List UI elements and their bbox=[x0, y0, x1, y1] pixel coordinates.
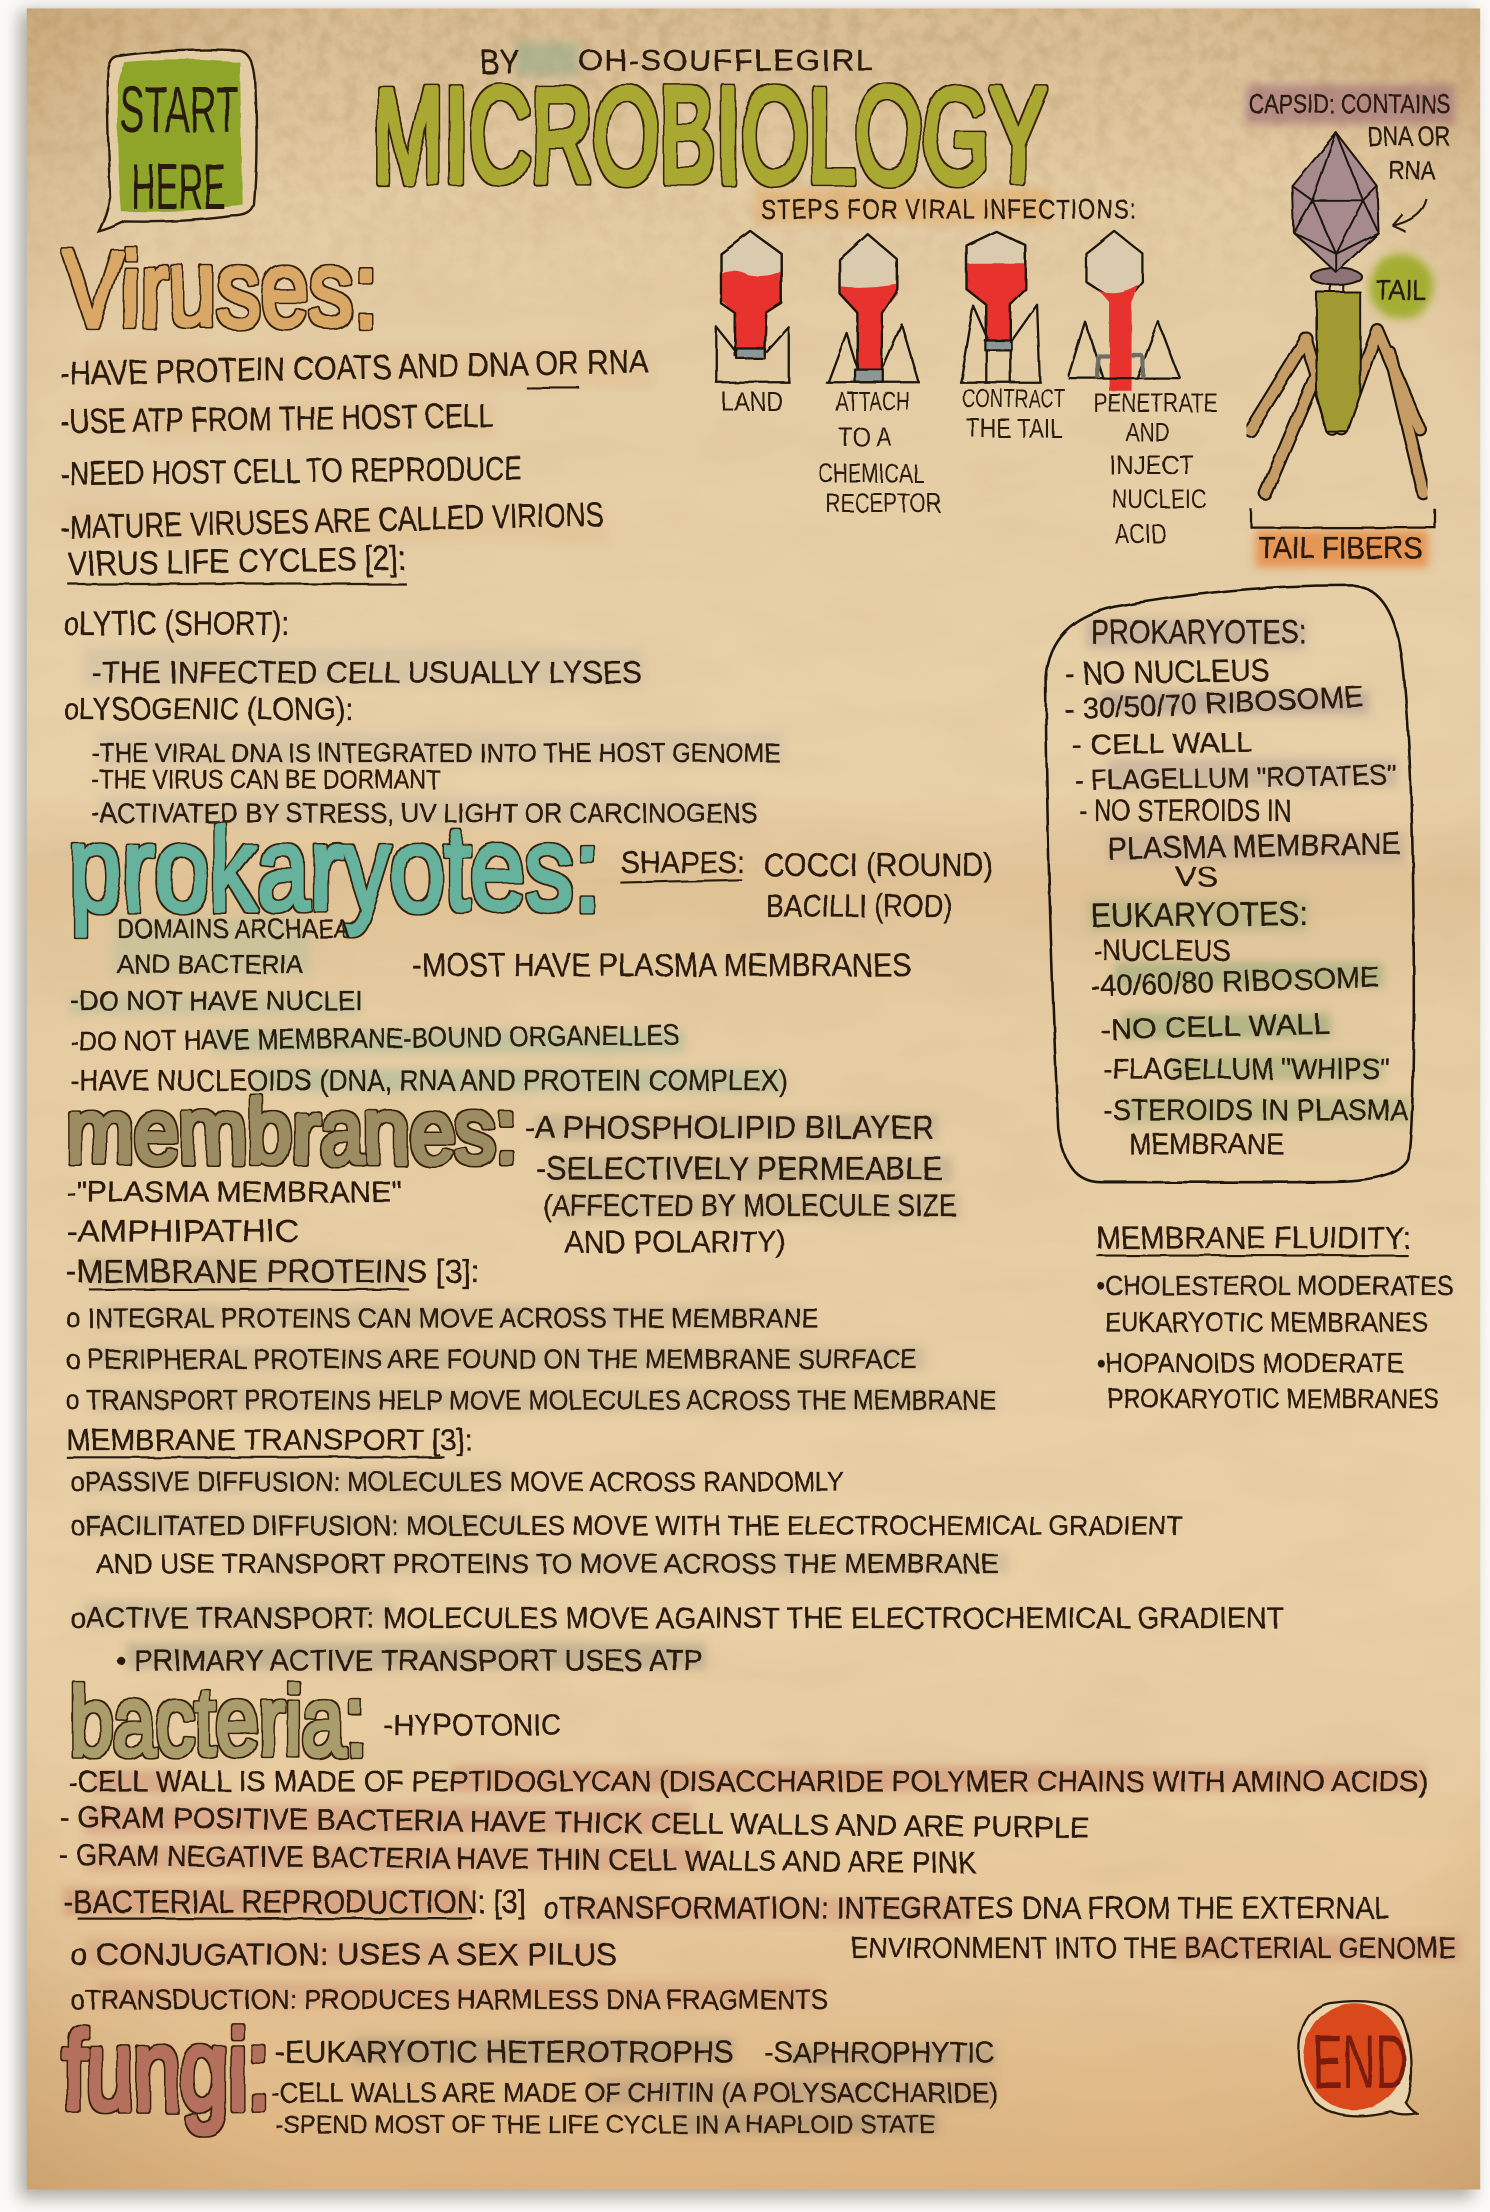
title: microbiology: MICROBIOLOGY bbox=[372, 59, 1047, 211]
text block: bacteria facts: -HYPOTONIC bbox=[384, 1709, 562, 1742]
text block: prokaryote shapes and facts: -DO NOT HAVE NUCLEI bbox=[71, 984, 363, 1016]
text block: membrane proteins: -MEMBRANE PROTEINS [3]: bbox=[66, 1253, 480, 1289]
text block: membrane transport bbox=[66, 1424, 1284, 1677]
text block: membrane transport: oACTIVE TRANSPORT: MOLECULES MOVE AGAINST THE ELECTROCHEMICAL GRADIENT bbox=[71, 1602, 1284, 1635]
collar bbox=[1311, 268, 1362, 285]
text block: bacterial reproduction: oTRANSDUCTION: PRODUCES HARMLESS DNA FRAGMENTS bbox=[71, 1983, 828, 2015]
text block: virus facts: -HAVE PROTEIN COATS AND DNA OR RNA bbox=[60, 343, 649, 393]
text block: prokaryote shapes and facts: DOMAINS ARCHAEA bbox=[117, 914, 350, 944]
label: attach to a chemical receptor: TO A bbox=[838, 422, 892, 452]
text block: fungi facts: -CELL WALLS ARE MADE OF CHITIN (A POLYSACCHARIDE) bbox=[271, 2076, 998, 2108]
diagram: step 1 land bbox=[715, 231, 790, 417]
eukaryotes list: -STEROIDS IN PLASMA bbox=[1103, 1094, 1408, 1127]
end speech bubble bbox=[1299, 2001, 1417, 2116]
text block: bacterial reproduction: -BACTERIAL REPRODUCTION: [3] bbox=[63, 1884, 526, 1920]
text block: fungi facts: -EUKARYOTIC HETEROTROPHS bbox=[275, 2034, 734, 2069]
bracket bbox=[1252, 509, 1435, 528]
prokaryotes list: VS bbox=[1175, 860, 1218, 892]
text block: prokaryote shapes and facts: -HAVE NUCLEOIDS (DNA, RNA AND PROTEIN COMPLEX) bbox=[71, 1064, 787, 1097]
text block: virus life cycles: VIRUS LIFE CYCLES [2]: bbox=[67, 540, 406, 584]
text block: membrane transport: oFACILITATED DIFFUSION: MOLECULES MOVE WITH THE ELECTROCHEMICAL GRADIENT bbox=[71, 1509, 1182, 1541]
text block: fungi facts: -SPEND MOST OF THE LIFE CYCLE IN A HAPLOID STATE bbox=[275, 2111, 935, 2139]
text block: virus life cycles: -THE VIRUS CAN BE DORMANT bbox=[92, 765, 440, 795]
text block: membrane fluidity bbox=[1096, 1220, 1453, 1414]
text block: membrane facts: -SELECTIVELY PERMEABLE bbox=[536, 1150, 943, 1186]
prokaryotes list bbox=[1064, 613, 1401, 892]
eukaryotes list: -NO CELL WALL bbox=[1100, 1008, 1331, 1047]
label: penetrate and inject nucleic acid: AND bbox=[1126, 418, 1170, 448]
text block: membrane fluidity: •HOPANOIDS MODERATE bbox=[1096, 1347, 1404, 1379]
text block: membrane transport: AND USE TRANSPORT PROTEINS TO MOVE ACROSS THE MEMBRANE bbox=[96, 1547, 999, 1579]
text block: membrane facts: (AFFECTED BY MOLECULE SIZE bbox=[543, 1188, 957, 1223]
text block: membrane proteins: o PERIPHERAL PROTEINS ARE FOUND ON THE MEMBRANE SURFACE bbox=[66, 1342, 917, 1374]
label: penetrate and inject nucleic acid: PENETRATE bbox=[1094, 388, 1218, 418]
text block: prokaryote shapes and facts: -MOST HAVE PLASMA MEMBRANES bbox=[412, 947, 911, 983]
text block: prokaryote shapes and facts: COCCI (ROUND) bbox=[763, 847, 993, 883]
text block: membrane facts: -"PLASMA MEMBRANE" bbox=[66, 1176, 402, 1209]
text block: bacteria facts: -CELL WALL IS MADE OF PEPTIDOGLYCAN (DISACCHARIDE POLYMER CHAINS WITH AMINO ACIDS) bbox=[68, 1766, 1428, 1799]
prokaryotes list: - CELL WALL bbox=[1072, 726, 1253, 761]
text block: bacteria facts: - GRAM POSITIVE BACTERIA HAVE THICK CELL WALLS AND ARE PURPLE bbox=[59, 1801, 1089, 1845]
text block: virus life cycles: -THE VIRAL DNA IS INTEGRATED INTO THE HOST GENOME bbox=[92, 738, 780, 768]
heading: steps for viral infections: STEPS FOR VIRAL INFECTIONS: bbox=[761, 193, 1137, 225]
prokaryotes list: - FLAGELLUM "ROTATES" bbox=[1075, 758, 1397, 796]
prokaryotes list: PLASMA MEMBRANE bbox=[1107, 826, 1401, 866]
label: attach to a chemical receptor: CHEMICAL bbox=[818, 458, 924, 488]
text block: virus life cycles: -ACTIVATED BY STRESS, UV LIGHT OR CARCINOGENS bbox=[92, 796, 758, 828]
text block: fungi facts bbox=[271, 2034, 998, 2139]
text block: bacterial reproduction: oTRANSFORMATION: INTEGRATES DNA FROM THE EXTERNAL bbox=[543, 1891, 1390, 1926]
text block: membrane fluidity: MEMBRANE FLUIDITY: bbox=[1096, 1220, 1411, 1255]
text block: membrane proteins: o INTEGRAL PROTEINS CAN MOVE ACROSS THE MEMBRANE bbox=[66, 1301, 818, 1333]
diagram: step 3 contract the tail bbox=[959, 231, 1065, 443]
text block: membrane facts: AND POLARITY) bbox=[564, 1225, 786, 1260]
label: contract the tail: THE TAIL bbox=[967, 413, 1063, 443]
start here speech bubble: HERE bbox=[131, 150, 226, 223]
tail bbox=[1316, 292, 1360, 432]
prokaryotes list: - 30/50/70 RIBOSOME bbox=[1064, 680, 1364, 726]
text block: bacteria facts bbox=[59, 1709, 1428, 1880]
label: attach to a chemical receptor: ATTACH bbox=[835, 387, 910, 417]
text block: virus life cycles bbox=[63, 540, 780, 828]
panel: prokaryotes vs eukaryotes bbox=[1046, 585, 1414, 1182]
text block: fungi facts: -SAPHROPHYTIC bbox=[765, 2036, 995, 2069]
text block: virus life cycles: oLYSOGENIC (LONG): bbox=[63, 691, 353, 726]
diagram: step 4 penetrate bbox=[1068, 231, 1218, 549]
eukaryotes list bbox=[1090, 895, 1408, 1161]
text block: membrane fluidity: •CHOLESTEROL MODERATES bbox=[1096, 1269, 1453, 1301]
text block: membrane transport: oPASSIVE DIFFUSION: MOLECULES MOVE ACROSS RANDOMLY bbox=[71, 1465, 844, 1497]
label: attach to a chemical receptor: RECEPTOR bbox=[825, 488, 941, 518]
text block: virus facts bbox=[60, 343, 649, 547]
start here speech bubble: START bbox=[120, 74, 238, 148]
text block: bacterial reproduction: o CONJUGATION: USES A SEX PILUS bbox=[71, 1937, 617, 1972]
prokaryotes list: PROKARYOTES: bbox=[1091, 613, 1307, 651]
eukaryotes list: EUKARYOTES: bbox=[1090, 895, 1308, 935]
heading: viruses: Viruses: bbox=[63, 229, 377, 349]
prokaryotes list: - NO NUCLEUS bbox=[1065, 653, 1270, 691]
text block: membrane fluidity: EUKARYOTIC MEMBRANES bbox=[1105, 1306, 1428, 1338]
text block: membrane facts: -A PHOSPHOLIPID BILAYER bbox=[525, 1109, 934, 1145]
text block: membrane facts bbox=[66, 1109, 957, 1260]
label: tail bbox=[1369, 254, 1434, 319]
text block: prokaryote shapes and facts: -DO NOT HAVE MEMBRANE-BOUND ORGANELLES bbox=[70, 1019, 680, 1057]
eukaryotes list: MEMBRANE bbox=[1129, 1128, 1284, 1161]
eukaryotes list: -FLAGELLUM "WHIPS" bbox=[1103, 1053, 1390, 1086]
text block: virus facts: -MATURE VIRUSES ARE CALLED VIRIONS bbox=[60, 496, 604, 547]
text block: virus life cycles: -THE INFECTED CELL USUALLY LYSES bbox=[92, 655, 642, 690]
text block: prokaryote shapes and facts: SHAPES: bbox=[621, 845, 745, 880]
label: tail fibers: TAIL FIBERS bbox=[1259, 531, 1422, 566]
eukaryotes list: -40/60/80 RIBOSOME bbox=[1090, 961, 1380, 1003]
label: penetrate and inject nucleic acid: NUCLEIC bbox=[1112, 484, 1206, 514]
text block: membrane proteins: o TRANSPORT PROTEINS HELP MOVE MOLECULES ACROSS THE MEMBRANE bbox=[66, 1383, 996, 1415]
panel outline bbox=[1046, 585, 1414, 1182]
heading: prokaryotes: prokaryotes: bbox=[69, 804, 600, 936]
text block: prokaryote shapes and facts: AND BACTERIA bbox=[117, 949, 303, 979]
text block: prokaryote shapes and facts: BACILLI (ROD) bbox=[766, 888, 952, 924]
text block: virus life cycles: oLYTIC (SHORT): bbox=[63, 605, 289, 643]
text block: bacteria facts: - GRAM NEGATIVE BACTERIA HAVE THIN CELL WALLS AND ARE PINK bbox=[59, 1839, 977, 1880]
label: penetrate and inject nucleic acid: ACID bbox=[1115, 519, 1167, 549]
text block: membrane transport: • PRIMARY ACTIVE TRANSPORT USES ATP bbox=[116, 1644, 703, 1677]
text block: membrane transport: MEMBRANE TRANSPORT [3]: bbox=[66, 1424, 473, 1457]
label: contract the tail bbox=[962, 384, 1065, 443]
text block: prokaryote shapes and facts bbox=[70, 845, 993, 1097]
text block: bacterial reproduction bbox=[63, 1884, 1456, 2015]
start here speech bubble bbox=[99, 50, 257, 231]
end speech bubble: END bbox=[1312, 2020, 1408, 2105]
byline: OH-SOUFFLEGIRL bbox=[579, 45, 875, 78]
label: capsid bbox=[1249, 89, 1450, 185]
text block: virus facts: -USE ATP FROM THE HOST CELL bbox=[60, 397, 494, 441]
label: capsid: RNA bbox=[1388, 155, 1435, 185]
eukaryotes list: -NUCLEUS bbox=[1094, 935, 1230, 968]
byline bbox=[480, 43, 875, 81]
heading: bacteria: bacteria: bbox=[69, 1666, 367, 1776]
heading: membranes: membranes: bbox=[66, 1081, 518, 1182]
byline: BY bbox=[480, 43, 519, 81]
prokaryotes list: - NO STEROIDS IN bbox=[1079, 793, 1291, 828]
label: penetrate and inject nucleic acid: INJECT bbox=[1109, 450, 1194, 480]
label: capsid: DNA OR bbox=[1367, 121, 1450, 151]
capsid bbox=[1292, 133, 1379, 272]
label: contract the tail: CONTRACT bbox=[962, 384, 1065, 414]
diagram: bacteriophage bbox=[1250, 133, 1424, 494]
label: land: LAND bbox=[721, 387, 783, 417]
bacteriophage labels bbox=[1249, 89, 1450, 566]
text block: virus facts: -NEED HOST CELL TO REPRODUCE bbox=[60, 450, 522, 493]
label: penetrate and inject nucleic acid bbox=[1094, 388, 1218, 549]
heading: fungi: fungi: bbox=[62, 2007, 271, 2133]
text block: membrane proteins bbox=[66, 1253, 996, 1415]
arrow to capsid bbox=[1393, 199, 1427, 231]
label: attach to a chemical receptor bbox=[818, 387, 941, 518]
tail fibers bbox=[1250, 330, 1424, 494]
diagram: step 2 attach bbox=[818, 234, 941, 518]
text block: membrane facts: -AMPHIPATHIC bbox=[66, 1213, 299, 1248]
label: tail: TAIL bbox=[1376, 274, 1427, 307]
